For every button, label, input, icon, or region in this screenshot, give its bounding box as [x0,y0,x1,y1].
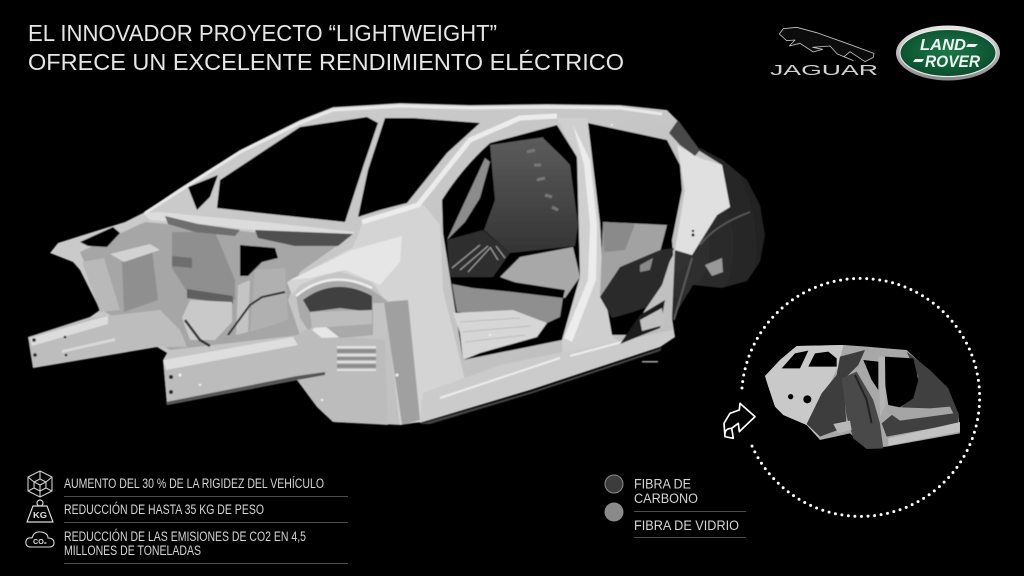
small hole marks [178,124,613,401]
interior rear wall [484,137,578,253]
engine bay highlight pieces [182,300,232,340]
interior black recess [543,127,576,170]
small dash mark [642,361,658,362]
logo: Jaguar [770,27,878,79]
logo: Land Rover: ROVER [925,52,981,71]
door opening: front [442,125,583,360]
black openings in engine bay [80,227,278,276]
centre pillar [557,118,625,367]
icon: CO2 cloud: CO₂ [33,539,47,546]
inset dark arch [842,372,883,449]
inset detail patch [833,421,852,433]
benefit: emissions: REDUCCIÓN DE LAS EMISIONES DE CO2 EN 4,5 [64,529,306,544]
title: OFRECE UN EXCELENTE RENDIMIENTO ELÉCTRICO [28,49,624,75]
main vehicle body structure [28,103,765,425]
icon: leaping jaguar [779,27,874,62]
icon: CO2 cloud [26,532,54,547]
door opening: rear [588,123,682,335]
inset rear quarter, dark [882,352,958,437]
suspension tower panels [122,232,288,335]
interior stripes [452,150,558,272]
title: EL INNOVADOR PROYECTO “LIGHTWEIGHT” [28,20,497,46]
inset pillar [878,357,886,417]
wheel arch inner detail [700,212,750,245]
interior dark lower wall [447,230,510,277]
inset vehicle, rear view [765,345,960,449]
left front rail [28,310,187,368]
benefit: rigidity: AUMENTO DEL 30 % DE LA RIGIDEZ DEL VEHÍCULO [64,476,324,491]
main shell [28,103,730,425]
wordmark: JAGUAR [770,63,878,79]
inset body [765,345,960,448]
inset dark side panel [807,350,865,437]
inset floor [885,407,953,421]
black floor slot [473,282,565,298]
front wheel arch [296,280,390,338]
roof rail highlight [145,106,662,213]
cowl band [143,212,355,241]
icon: weight: KG [33,511,47,520]
front floor section [452,284,563,323]
benefits list [26,471,348,564]
sill [420,330,675,423]
wiper and harness [228,292,285,335]
benefit: emissions [64,529,306,558]
inset windows [782,351,837,403]
side skirt pressings [337,346,376,371]
icon: cube [28,471,52,497]
interior side panel [447,158,490,240]
label: carbon fibre: CARBONO [634,491,698,506]
rear floor section [500,247,580,298]
benefit: emissions: MILLONES DE TONELADAS [64,543,201,558]
dark roof end band [669,120,700,156]
icon: rotate arrow [724,403,755,438]
logo: Land Rover: LAND [920,37,966,54]
right front rail and firewall [163,323,388,425]
title [28,20,624,75]
floor pan [453,310,547,360]
benefit: weight: REDUCCIÓN DE HASTA 35 KG DE PESO [64,502,264,517]
lower rear shards [620,300,665,344]
swatch: carbon fibre [605,475,623,493]
inset rear openings [863,357,918,407]
label: carbon fibre [634,476,698,506]
label: carbon fibre: FIBRA DE [634,476,691,492]
rear pillar [675,145,730,255]
front engine bay [80,222,345,350]
front windows [188,117,480,222]
inset rear beam [888,422,960,446]
label: glass fibre: FIBRA DE VIDRIO [634,518,739,533]
dotted circle [742,278,980,516]
legend [604,475,746,538]
icon: weight [27,500,53,522]
inset front cabin, light [765,345,843,438]
rear seat base, dark [600,248,674,318]
dark cowl strip [255,230,353,246]
logo: Land Rover [896,26,1000,80]
rear wheel arch, dark carbon fibre [623,148,765,345]
fender and A-pillar base [287,205,470,425]
rear floor [600,222,667,297]
swatch: glass fibre [604,502,624,522]
